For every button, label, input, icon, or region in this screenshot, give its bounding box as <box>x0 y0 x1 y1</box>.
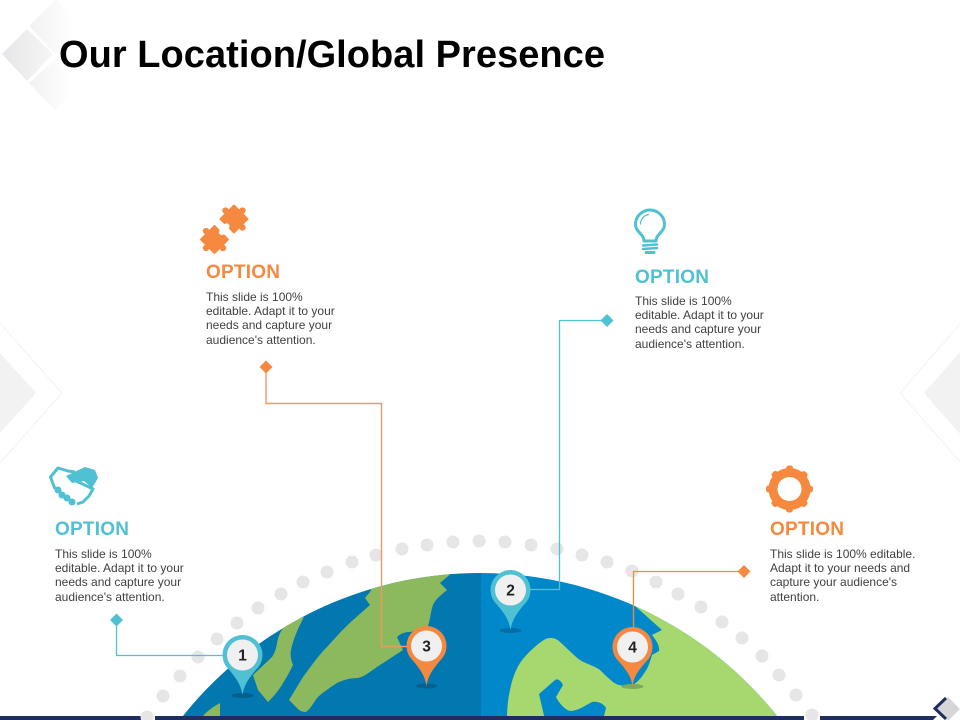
text block: option left <box>55 519 184 604</box>
body text: needs and capture your <box>55 575 181 589</box>
pin 4: 4 <box>628 640 637 656</box>
connector 2 <box>528 314 614 590</box>
large land mass left <box>289 574 450 712</box>
body text: This slide is 100% <box>635 294 732 308</box>
corner navigation diamond <box>935 697 960 720</box>
globe right hemisphere <box>481 573 777 716</box>
body text: audience's attention. <box>206 333 316 347</box>
pin 1 <box>222 635 262 698</box>
dotted arc around globe <box>156 534 802 702</box>
pin 3: 3 <box>422 638 431 656</box>
body text: Adapt it to your needs and <box>770 561 910 575</box>
large land mass right <box>507 606 777 716</box>
body text: This slide is 100% <box>55 547 152 561</box>
small land mass left <box>253 617 304 702</box>
pin 4 <box>612 627 653 689</box>
icon: light bulb <box>636 210 664 252</box>
body text: This slide is 100% editable. <box>770 547 915 561</box>
body text: audience's attention. <box>55 590 165 604</box>
icon: puzzle pieces <box>193 198 255 261</box>
connector 1 <box>110 614 224 656</box>
globe left hemisphere <box>183 573 481 716</box>
body text: attention. <box>770 590 819 604</box>
body text: editable. Adapt it to your <box>206 304 335 318</box>
body text: This slide is 100% <box>206 290 303 304</box>
inland sea <box>539 679 606 720</box>
right side chevron decoration <box>900 324 960 462</box>
bottom left land <box>203 703 220 716</box>
pin 2 <box>491 570 530 633</box>
body text: needs and capture your <box>635 322 761 336</box>
pin 3 <box>406 626 447 688</box>
heading: option: OPTION <box>770 519 844 540</box>
text block: option top left <box>206 262 335 347</box>
connector 4 <box>634 565 750 628</box>
connector 3 <box>260 360 408 646</box>
globe <box>183 573 777 716</box>
body text: capture your audience's <box>770 575 897 589</box>
icon: gear <box>768 468 810 510</box>
heading: option: OPTION <box>55 519 129 540</box>
title: Our Location/Global Presence <box>59 34 605 76</box>
icon: handshake <box>50 467 98 506</box>
left side chevron decoration <box>0 323 62 463</box>
heading: option: OPTION <box>206 262 280 283</box>
body text: editable. Adapt it to your <box>55 561 184 575</box>
body text: editable. Adapt it to your <box>635 308 764 322</box>
heading: option: OPTION <box>635 267 709 288</box>
text block: option top right <box>635 267 764 351</box>
bottom bar <box>0 708 937 720</box>
decorative corner diamonds <box>2 0 84 110</box>
body text: audience's attention. <box>635 337 745 351</box>
pin 1: 1 <box>238 648 247 664</box>
text block: option right <box>770 519 915 604</box>
body text: needs and capture your <box>206 318 332 332</box>
pin 2: 2 <box>506 582 515 600</box>
